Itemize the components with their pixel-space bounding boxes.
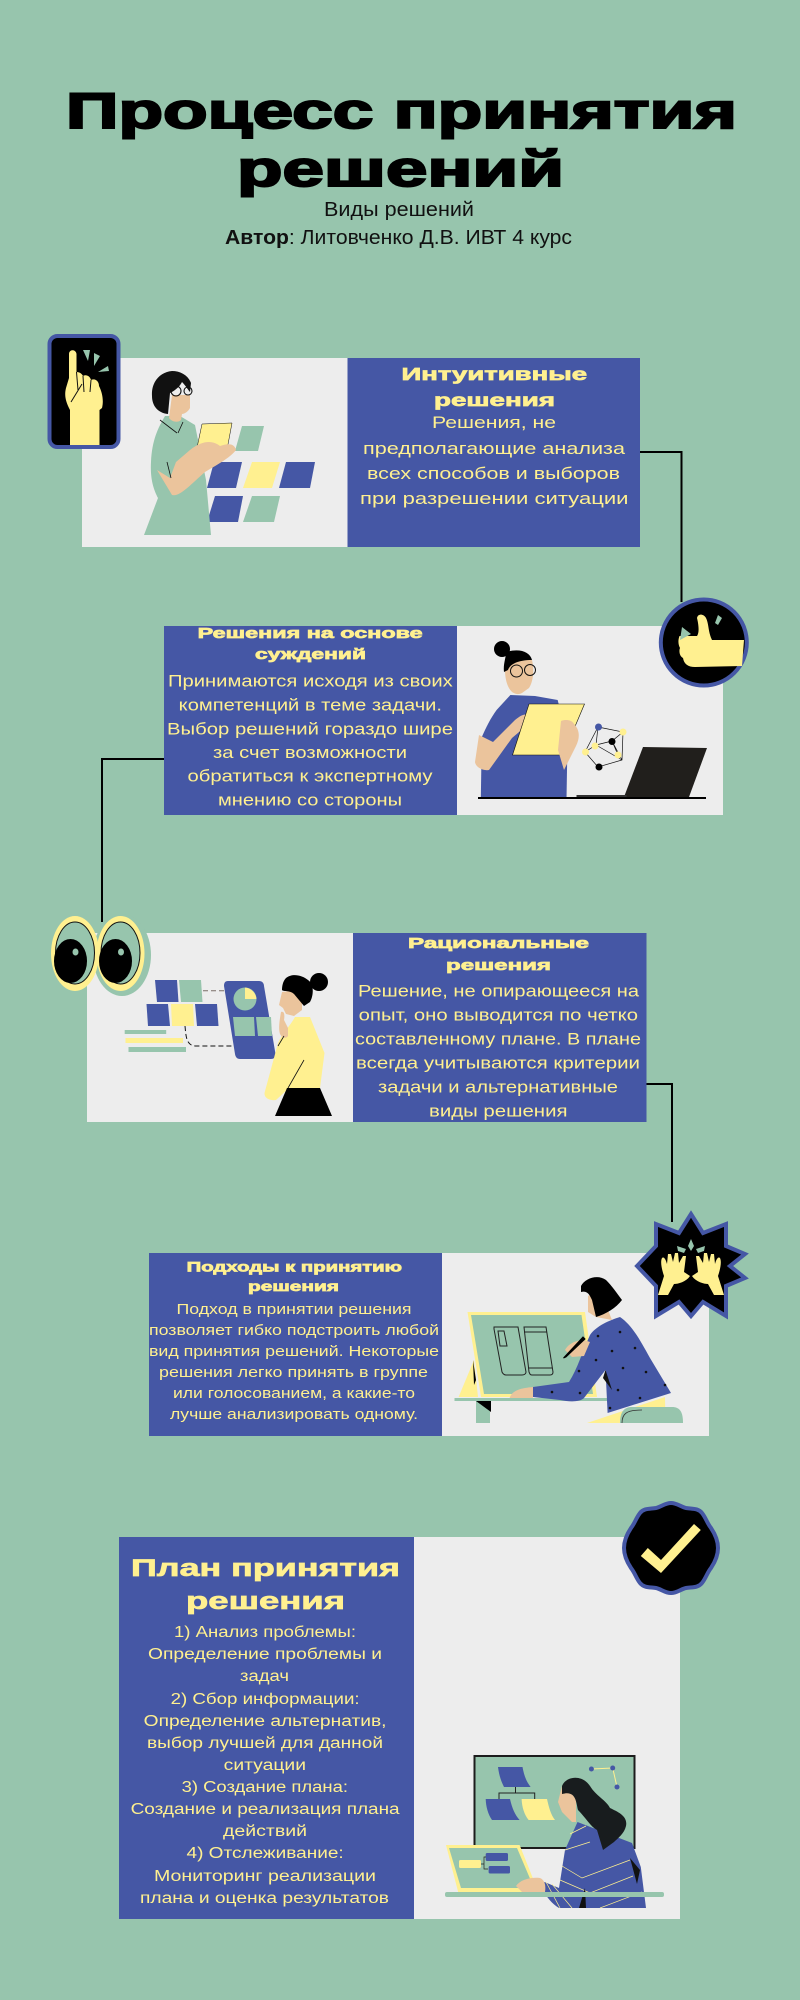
heading [198,625,423,663]
title [66,83,737,197]
body [360,413,628,508]
body: выбор лучшей для данной [147,1735,383,1752]
body: Определение проблемы и [148,1646,382,1663]
illustration: woman with tablet and charts [125,973,332,1116]
body: 3) Создание плана: [182,1779,348,1796]
connector 3 [646,1084,672,1222]
heading: Интуитивные [402,364,587,384]
heading: решения [446,957,551,974]
body: Решение, не опирающееся на [358,982,640,1001]
body: задачи и альтернативные [378,1078,618,1097]
heading: решения [248,1279,339,1294]
body: Создание и реализация плана [131,1801,400,1818]
panel image background [457,626,723,815]
panel: approaches to decision making [149,1253,709,1436]
body: опыт, оно выводится по четко [359,1006,638,1025]
heading [408,935,589,974]
panel text background [348,358,640,547]
body: 2) Сбор информации: [171,1691,360,1708]
text block [131,1555,400,1907]
body: 4) Отслеживание: [186,1845,344,1862]
text block [360,364,628,508]
body: вид принятия решений. Некоторые [149,1343,439,1360]
title: Процесс принятия [66,83,737,139]
body: за счет возможности [213,743,407,762]
icon: pointing finger [50,336,118,447]
body: при разрешении ситуации [360,489,628,508]
heading [402,364,587,410]
body: виды решения [429,1102,568,1121]
body: Подход в принятии решения [176,1301,412,1318]
body: всех способов и выборов [367,464,620,483]
illustration: woman at laptop and board [445,1756,664,1908]
author line: Автор: Литовченко Д.В. ИВТ 4 курс [225,227,572,249]
connector 2 [102,759,164,922]
body: Выбор решений гораздо шире [167,720,453,739]
icon: thumbs up [661,600,747,686]
panel image background [87,933,354,1122]
body: решения легко принять в группе [159,1364,428,1381]
icon: check mark badge [624,1503,718,1593]
heading: Решения на основе [198,625,423,642]
body: мнению со стороны [218,791,402,810]
body: компетенций в теме задачи. [179,696,442,715]
heading [131,1555,400,1615]
body: позволяет гибко подстроить любой [149,1322,439,1339]
title: решений [237,141,564,197]
body: действий [223,1823,307,1840]
body: Мониторинг реализации [154,1868,376,1885]
body: плана и оценка результатов [140,1890,389,1907]
body [131,1624,400,1907]
panel image background [414,1537,680,1919]
body: ситуации [224,1757,306,1774]
heading: суждений [255,646,366,663]
body: Принимаются исходя из своих [168,672,453,691]
body: Решения, не [432,413,556,432]
subtitle: Виды решений [324,199,474,221]
text block [167,625,453,810]
panel image background [442,1253,709,1436]
body: обратиться к экспертному [188,767,433,786]
panel: decision plan [119,1537,680,1919]
body: Определение альтернатив, [144,1713,386,1730]
illustration: woman with tablet and laptop [475,641,707,799]
body: лучше анализировать одному. [170,1406,418,1423]
heading: Подходы к принятию [187,1260,402,1275]
text block [149,1260,439,1423]
heading: План принятия [131,1555,400,1582]
icon: raised hands in star [637,1214,745,1316]
illustration: woman drawing on tablet [454,1277,683,1423]
panel text background [164,626,457,815]
panel: judgment-based decisions [164,625,723,815]
heading [187,1260,402,1294]
body: или голосованием, а какие-то [173,1385,415,1402]
heading: решения [434,390,555,410]
panel text background [353,933,646,1122]
icon: eyes [51,914,151,996]
panel text background [149,1253,442,1436]
panel: intuitive decisions [82,358,640,547]
panel text background [119,1537,414,1919]
text block [355,935,641,1121]
panel image background [82,358,348,547]
heading: Рациональные [408,935,589,952]
body: 1) Анализ проблемы: [174,1624,356,1641]
body [167,672,453,810]
illustration: woman with tablet and notes [144,371,315,535]
body: составленному плане. В плане [355,1030,641,1049]
panel: rational decisions [87,933,646,1122]
heading: решения [186,1588,345,1615]
body [355,982,641,1121]
body: задач [240,1668,289,1685]
connector 1 [640,452,682,602]
body: предполагающие анализа [363,439,626,458]
body: всегда учитываются критерии [356,1054,640,1073]
body [149,1301,439,1423]
